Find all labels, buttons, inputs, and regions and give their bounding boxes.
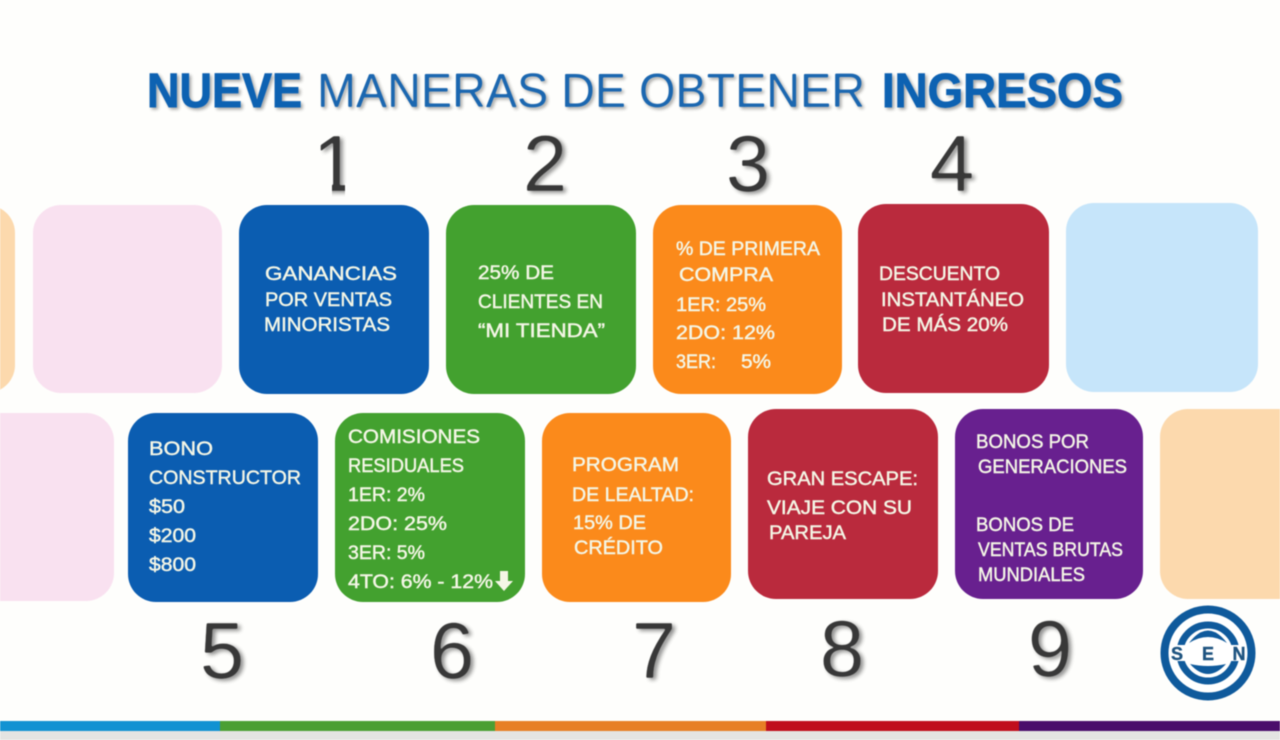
panel 5: bono constructor [128, 413, 318, 602]
panel 1: ganancias: GANANCIAS [265, 264, 397, 285]
panel 9: bonos: BONOS POR [976, 432, 1089, 453]
panel 6: comisiones residuales: RESIDUALES [348, 456, 464, 477]
title: NUEVE [147, 65, 302, 118]
panel 6: comisiones residuales: 2DO: 25% [348, 514, 447, 535]
panel 8: gran escape: PAREJA [769, 523, 846, 544]
panel 2: clientes [446, 205, 636, 394]
number 4: 4 [930, 119, 974, 208]
panel 7: programa de lealtad [542, 413, 731, 602]
panel 1: ganancias [239, 205, 429, 394]
panel 6: comisiones residuales: 3ER: 5% [348, 543, 425, 564]
number 5: 5 [200, 606, 244, 695]
panel 9: bonos [955, 409, 1143, 599]
panel 5: bono constructor: $50 [149, 497, 185, 518]
panel 5: bono constructor: BONO [149, 439, 213, 460]
number 9: 9 [1028, 604, 1072, 693]
number 8: 8 [820, 604, 864, 693]
panel 7: programa de lealtad: CRÉDITO [574, 538, 663, 559]
logo: SEN: N [1232, 644, 1246, 664]
panel 6: comisiones residuales: 4TO: 6% - 12% [348, 572, 493, 593]
panel 3: primera compra [653, 205, 842, 394]
panel 4: descuento: DE MÁS 20% [882, 315, 1008, 336]
number 2: 2 [523, 119, 567, 208]
panel 8: gran escape [748, 409, 938, 599]
panel 4: descuento: INSTANTÁNEO [881, 290, 1024, 311]
panel 4: descuento: DESCUENTO [879, 264, 1000, 285]
decorative tile: pink bottom [0, 413, 114, 601]
panel 6: comisiones residuales [335, 413, 525, 602]
panel 3: primera compra: 3ER: [676, 352, 716, 373]
number 3: 3 [726, 119, 770, 208]
panel 7: programa de lealtad: 15% DE [573, 513, 646, 534]
number 1: 1 [313, 119, 357, 208]
title: INGRESOS [882, 65, 1123, 118]
title [147, 65, 1123, 118]
logo: SEN: S [1171, 644, 1183, 664]
panel 3: primera compra: % DE PRIMERA [676, 239, 820, 260]
panel 6: comisiones residuales: COMISIONES [348, 427, 480, 448]
panel 2: clientes: “MI TIENDA” [478, 321, 605, 342]
panel 5: bono constructor: CONSTRUCTOR [149, 468, 301, 489]
panel 9: bonos: VENTAS BRUTAS [978, 540, 1123, 561]
number 6: 6 [430, 606, 474, 695]
panel 9: bonos: MUNDIALES [978, 565, 1085, 586]
panel 1: ganancias: POR VENTAS [265, 290, 392, 311]
logo: SEN [1164, 610, 1252, 696]
panel 5: bono constructor: $200 [149, 526, 196, 547]
panel 2: clientes: CLIENTES EN [478, 292, 603, 313]
title: MANERAS DE OBTENER [317, 65, 865, 118]
panel 3: primera compra: 1ER: 25% [676, 295, 766, 316]
number 7: 7 [632, 606, 676, 695]
panel 1: ganancias: MINORISTAS [264, 315, 390, 336]
panel 7: programa de lealtad: DE LEALTAD: [572, 485, 694, 506]
panel 2: clientes: 25% DE [478, 263, 554, 284]
bottom colour bar [0, 721, 1280, 740]
panel 5: bono constructor: $800 [149, 555, 196, 576]
decorative tile: pink top [33, 205, 222, 393]
panel 6: comisiones residuales: 1ER: 2% [348, 485, 425, 506]
icon: down arrow [495, 571, 513, 591]
panel 3: primera compra: 5% [741, 352, 771, 373]
decorative tile: light blue [1066, 203, 1258, 392]
decorative tile: peach left [0, 205, 15, 393]
panel 3: primera compra: COMPRA [679, 265, 773, 286]
decorative tile: peach right [1160, 409, 1280, 599]
panel 8: gran escape: GRAN ESCAPE: [767, 469, 918, 490]
panel 9: bonos: BONOS DE [976, 515, 1074, 536]
panel 9: bonos: GENERACIONES [978, 457, 1127, 478]
panel 4: descuento [858, 204, 1049, 393]
logo: SEN: E [1202, 644, 1214, 664]
panel 7: programa de lealtad: PROGRAM [572, 455, 679, 476]
panel 3: primera compra: 2DO: 12% [676, 323, 775, 344]
panel 8: gran escape: VIAJE CON SU [767, 498, 912, 519]
